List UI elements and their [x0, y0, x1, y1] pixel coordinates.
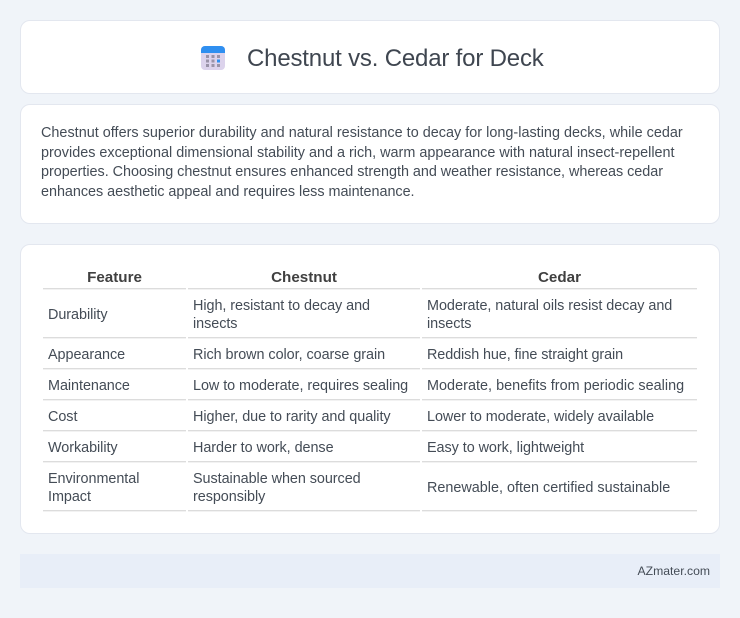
comparison table: Easy to work, lightweight [427, 440, 584, 456]
comparison table: Harder to work, dense [193, 440, 334, 456]
summary card [20, 104, 720, 224]
comparison table: Workability [48, 440, 118, 456]
summary text: properties. Choosing chestnut ensures enhanced strength and weather resistance, whereas cedar [41, 164, 663, 180]
comparison table: Durability [48, 307, 107, 323]
comparison table: insects [427, 316, 471, 332]
comparison table: Renewable, often certified sustainable [427, 480, 670, 496]
comparison table: Impact [48, 489, 91, 505]
comparison table: Moderate, natural oils resist decay and [427, 298, 672, 314]
comparison table: Maintenance [48, 378, 130, 394]
comparison table: Moderate, benefits from periodic sealing [427, 378, 684, 394]
comparison table: responsibly [193, 489, 265, 505]
title card [20, 20, 720, 94]
title: Chestnut vs. Cedar for Deck [247, 45, 544, 72]
comparison table [43, 269, 697, 512]
footer bar [20, 554, 720, 588]
comparison table: Chestnut [271, 269, 337, 286]
comparison table: Rich brown color, coarse grain [193, 347, 385, 363]
comparison table: Lower to moderate, widely available [427, 409, 654, 425]
comparison table: insects [193, 316, 237, 332]
comparison table: Cost [48, 409, 77, 425]
comparison table: Cedar [538, 269, 581, 286]
comparison table: Sustainable when sourced [193, 471, 361, 487]
comparison table: Environmental [48, 471, 139, 487]
comparison table: Low to moderate, requires sealing [193, 378, 408, 394]
comparison table card [20, 244, 720, 534]
comparison table: Feature [87, 269, 142, 286]
comparison table: High, resistant to decay and [193, 298, 370, 314]
comparison table: Reddish hue, fine straight grain [427, 347, 623, 363]
summary text: enhances aesthetic appeal and requires less maintenance. [41, 184, 415, 200]
comparison table: Appearance [48, 347, 125, 363]
comparison table: Higher, due to rarity and quality [193, 409, 391, 425]
summary text: provides exceptional dimensional stability and a rich, warm appearance with natural insect-repellent [41, 144, 675, 160]
footer brand: AZmater.com [638, 564, 710, 578]
icon: calendar [201, 46, 225, 70]
summary text: Chestnut offers superior durability and natural resistance to decay for long-lasting decks, while cedar [41, 125, 683, 141]
summary text [41, 125, 683, 200]
